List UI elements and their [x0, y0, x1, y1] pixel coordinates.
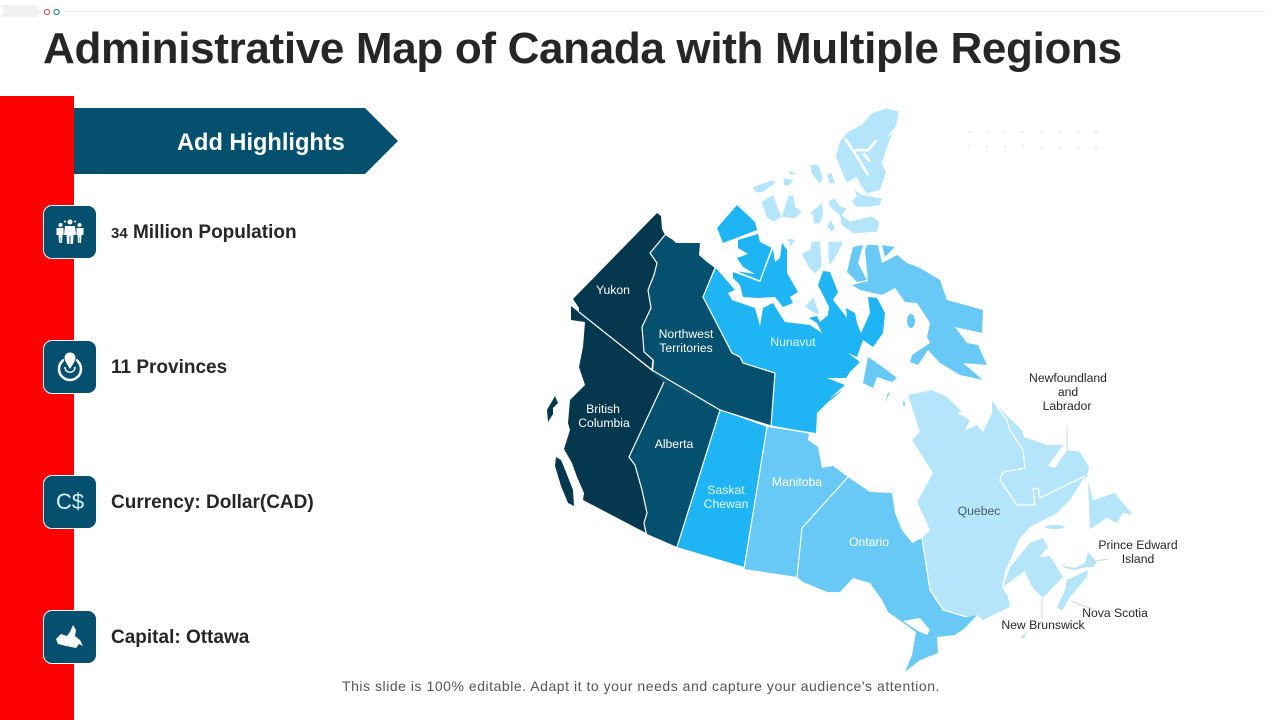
- Georgian Bay: [903, 618, 930, 635]
- region: Baffin Island: [847, 245, 987, 406]
- label: Alberta: Alberta: [655, 437, 694, 451]
- label: Saskatchewan: Saskat: [707, 483, 745, 497]
- highlights arrow banner: [74, 108, 398, 174]
- Grand Manan island: [1020, 631, 1028, 638]
- province borders: [579, 235, 1085, 617]
- region: British Columbia: [547, 306, 664, 533]
- icon: currency: C$: [56, 489, 84, 514]
- region: Ontario: [797, 477, 977, 672]
- label: Nova Scotia: Nova Scotia: [1082, 606, 1148, 620]
- region: Gaspe peninsula: [1003, 538, 1048, 587]
- region: Nova Scotia: [1057, 570, 1088, 611]
- label: Northwest Territories: Northwest: [659, 327, 713, 341]
- label: British Columbia: Columbia: [578, 416, 630, 430]
- leader lines: [1042, 426, 1108, 618]
- icon: location pin: [43, 340, 97, 394]
- footer note: This slide is 100% editable. Adapt it to your needs and capture your audience's attention.: [342, 678, 940, 694]
- region: New Brunswick: [1023, 556, 1063, 598]
- label: Saskatchewan: Chewan: [704, 497, 748, 511]
- region: Newfoundland and Labrador: [992, 400, 1133, 529]
- region: Alberta: [629, 382, 720, 547]
- label: Prince Edward Island: Prince Edward: [1098, 538, 1178, 552]
- label: Newfoundland and Labrador: Labrador: [1043, 399, 1091, 413]
- label: Manitoba: Manitoba: [772, 475, 822, 489]
- region: Yukon: [573, 213, 665, 370]
- label: Newfoundland and Labrador: Newfoundland: [1029, 371, 1107, 385]
- text: provinces: 11 Provinces: [111, 357, 227, 378]
- region: Northwest Territories: [642, 235, 775, 426]
- label: Prince Edward Island: Island: [1122, 552, 1154, 566]
- text: currency: Currency: Dollar(CAD): [111, 492, 314, 513]
- icon: people: [43, 205, 97, 259]
- decorative dots: [968, 130, 1098, 148]
- red side band: [0, 96, 74, 720]
- region: central Arctic islands: [787, 238, 843, 313]
- text: capital: Capital: Ottawa: [111, 627, 249, 648]
- label: British Columbia: British: [586, 402, 620, 416]
- highlights arrow banner: Add Highlights: [177, 130, 345, 156]
- region: Quebec: [908, 390, 1085, 620]
- text: population: 34 Million Population: [111, 222, 297, 243]
- region: Prince Edward Island: [1060, 552, 1097, 570]
- region: Arctic islands: [753, 108, 898, 233]
- region: Saskatchewan: [677, 410, 767, 567]
- region: Manitoba: [744, 427, 848, 577]
- label: Newfoundland and Labrador: and: [1058, 385, 1078, 399]
- icon: currency: [43, 475, 97, 529]
- label: Yukon: Yukon: [596, 283, 630, 297]
- label: Ontario: Ontario: [849, 535, 889, 549]
- label: New Brunswick: New Brunswick: [1001, 618, 1086, 632]
- label: Quebec: Quebec: [958, 504, 1000, 518]
- icon: Canada map: [43, 610, 97, 664]
- title: Administrative Map of Canada with Multiple Regions: [43, 24, 1122, 73]
- top decoration: [0, 5, 1265, 17]
- label: Northwest Territories: Territories: [659, 341, 713, 355]
- label: Nunavut: Nunavut: [770, 335, 816, 349]
- region: Nunavut: [703, 205, 885, 433]
